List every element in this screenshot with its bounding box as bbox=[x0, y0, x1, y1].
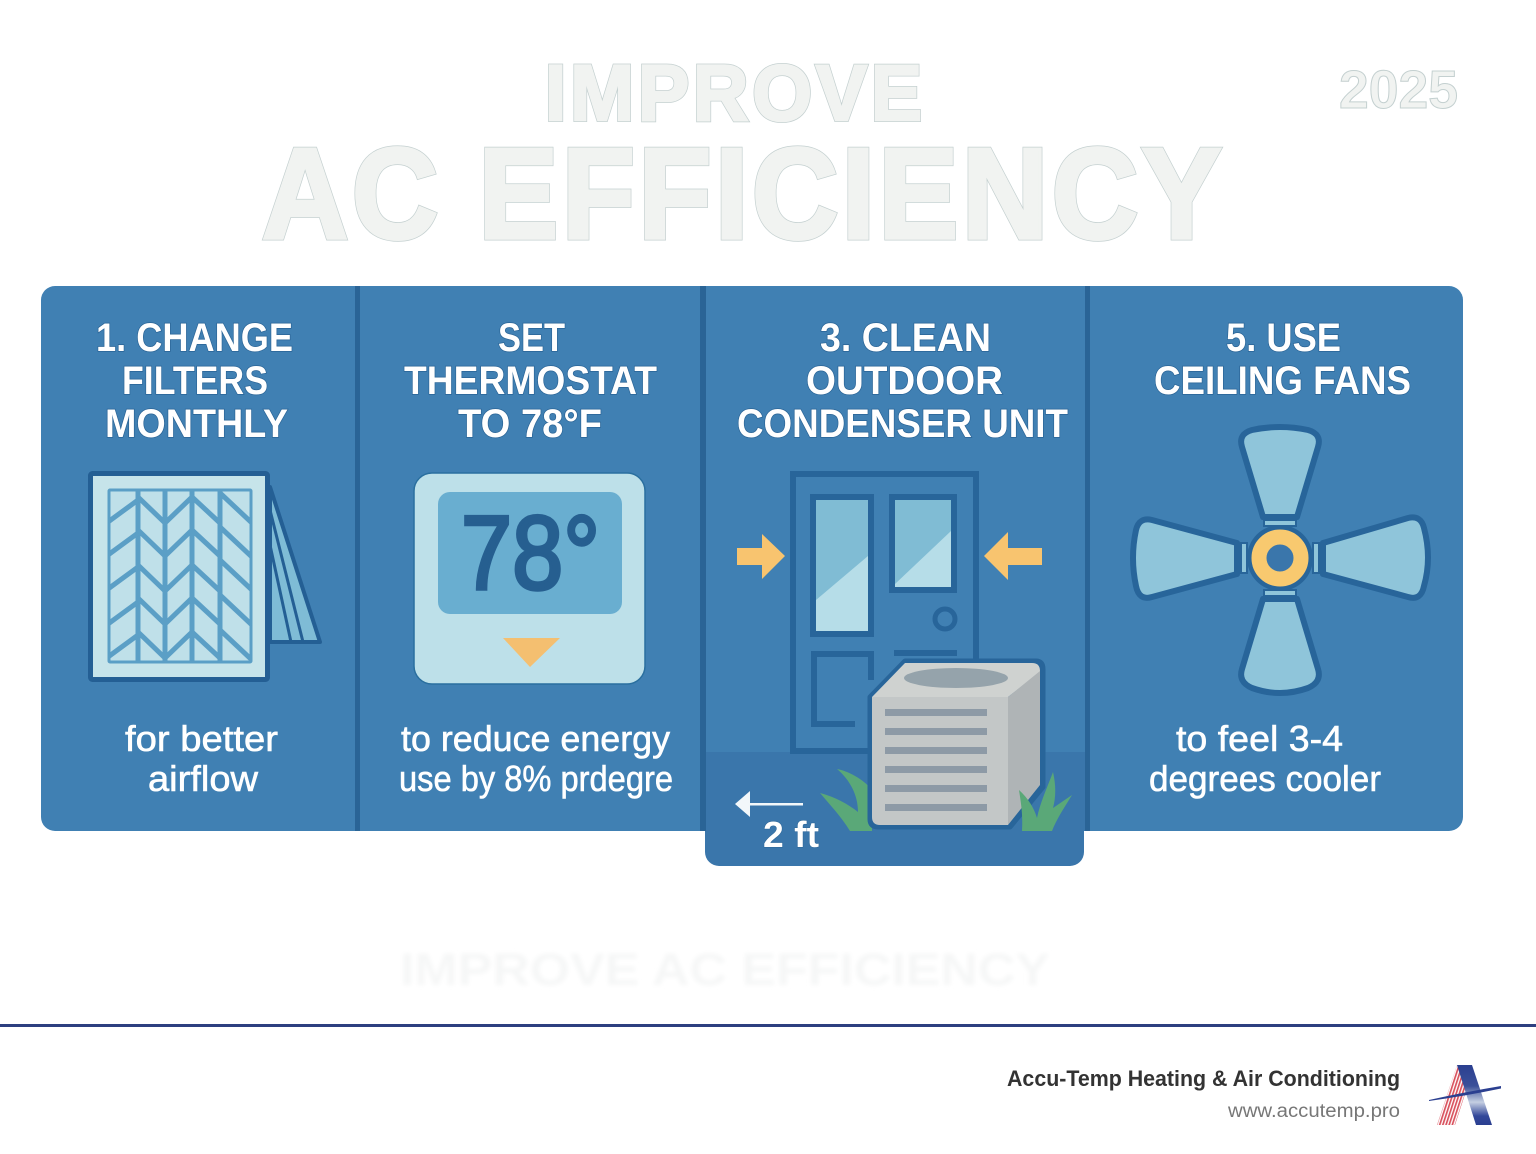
text: to feel 3-4 degrees cooler: to feel 3-4 bbox=[1176, 718, 1343, 759]
title: AC EFFICIENCY: AC EFFICIENCY bbox=[262, 122, 1225, 266]
footer: logo bbox=[1429, 1065, 1501, 1125]
year label: 2025 bbox=[1339, 60, 1458, 120]
panel: ceiling fans bbox=[1133, 316, 1428, 799]
label: 2 ft: 2 ft bbox=[763, 814, 819, 855]
heading: set thermostat to 78F: SET bbox=[498, 316, 565, 360]
text: to feel 3-4 degrees cooler bbox=[1149, 718, 1381, 799]
footer: website: www.accutemp.pro bbox=[1227, 1101, 1400, 1122]
text: for better airflow bbox=[125, 718, 278, 799]
heading: change filters monthly: 1. CHANGE bbox=[96, 316, 293, 360]
icon: ceiling fan bbox=[1133, 427, 1428, 693]
heading: set thermostat to 78F: TO 78°F bbox=[458, 402, 602, 446]
heading: clean outdoor condenser unit bbox=[737, 316, 1068, 446]
heading: change filters monthly: MONTHLY bbox=[105, 402, 288, 446]
icon: thermostat bbox=[414, 473, 645, 684]
panel: change filters bbox=[90, 316, 320, 799]
heading: use ceiling fans: CEILING FANS bbox=[1154, 359, 1411, 403]
text: to reduce energy bbox=[399, 718, 673, 799]
panel: set thermostat bbox=[399, 316, 673, 799]
heading: use ceiling fans bbox=[1154, 316, 1411, 403]
text: to reduce energy: to reduce energy bbox=[401, 718, 670, 759]
title: AC EFFICIENCY: AC EFFICIENCY bbox=[262, 122, 1225, 266]
panel background bbox=[41, 286, 1463, 831]
text: to feel 3-4 degrees cooler: degrees cooler bbox=[1149, 758, 1381, 799]
ground band bbox=[706, 752, 1085, 831]
title: IMPROVE: IMPROVE bbox=[545, 48, 926, 137]
heading: clean outdoor condenser unit: 3. CLEAN bbox=[820, 316, 991, 360]
ghost watermark title: IMPROVE AC EFFICIENCY bbox=[400, 944, 1050, 995]
heading: change filters monthly bbox=[96, 316, 293, 446]
icon: condenser unit bbox=[870, 661, 1043, 827]
text: for better airflow: airflow bbox=[148, 758, 259, 799]
icon: pleated air filter bbox=[90, 474, 320, 680]
icon: distance arrow bbox=[735, 791, 803, 817]
heading: set thermostat to 78F bbox=[404, 316, 657, 446]
title: IMPROVE: IMPROVE bbox=[545, 48, 926, 137]
panel extension under step 3 bbox=[705, 752, 1084, 866]
icon: right airflow arrow bbox=[984, 532, 1042, 580]
heading: use ceiling fans: 5. USE bbox=[1226, 316, 1341, 360]
icon: grass right bbox=[1019, 772, 1072, 831]
footer: company name: Accu-Temp Heating & Air Conditioning bbox=[1007, 1066, 1400, 1091]
footer rule bbox=[0, 1024, 1536, 1027]
icon: door bbox=[793, 474, 976, 751]
heading: clean outdoor condenser unit: OUTDOOR bbox=[806, 359, 1003, 403]
icon: left airflow arrow bbox=[737, 534, 785, 579]
panel: clean condenser bbox=[735, 316, 1072, 855]
heading: set thermostat to 78F: THERMOSTAT bbox=[404, 359, 657, 403]
heading: clean outdoor condenser unit: CONDENSER UNIT bbox=[737, 402, 1068, 446]
icon: grass left bbox=[820, 769, 872, 831]
text: for better airflow: for better bbox=[125, 718, 278, 759]
icon: thermostat: 78° bbox=[461, 495, 600, 612]
text: to reduce energy: use by 8% prdegre bbox=[399, 758, 673, 799]
heading: change filters monthly: FILTERS bbox=[122, 359, 268, 403]
